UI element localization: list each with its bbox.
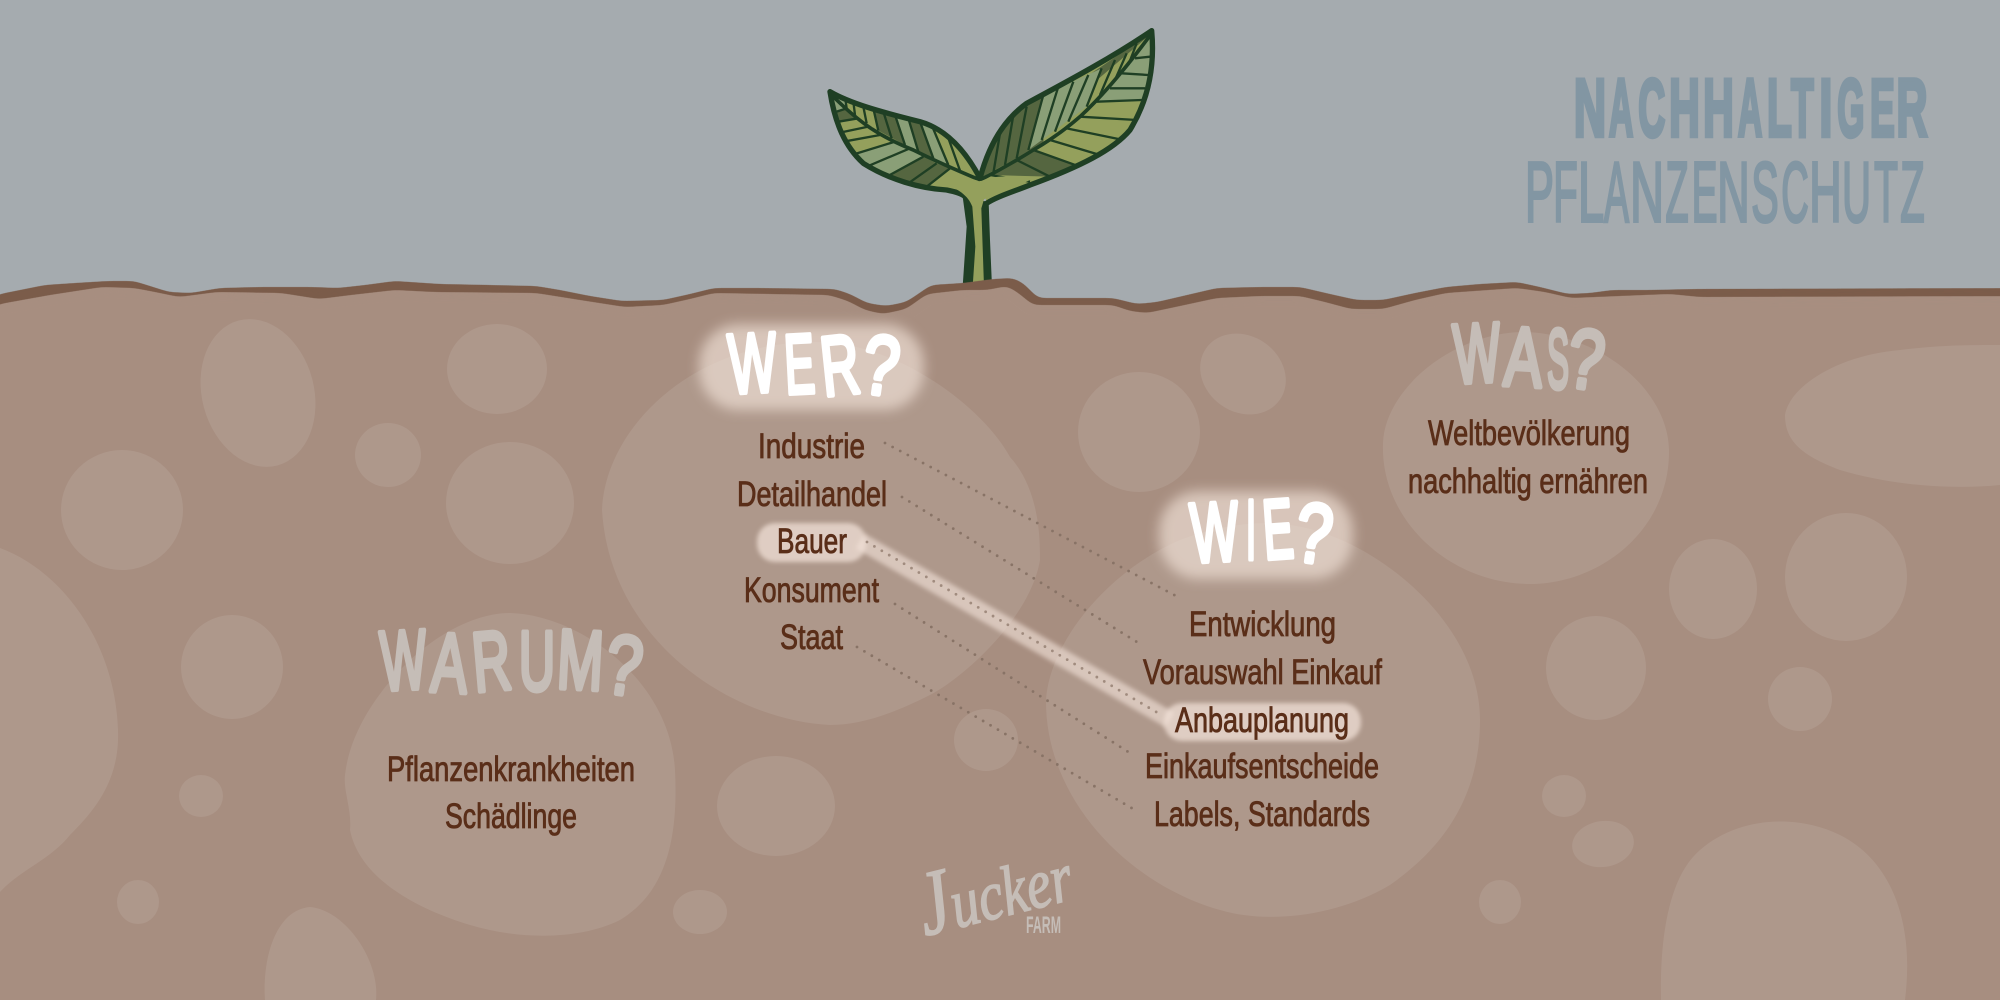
dotted connector lines between WER and WIE lists [857, 443, 1180, 810]
text: was items: nachhaltig ernähren [1408, 462, 1648, 501]
right leaf [977, 27, 1160, 207]
title: F [1553, 146, 1578, 240]
soil stones and blobs [0, 306, 2000, 1000]
list: wer items: Konsument [744, 571, 879, 610]
heading: wer: E [782, 316, 817, 412]
title: I [1819, 63, 1832, 154]
heading: was: A [1502, 309, 1545, 405]
logo: Jucker Farm: FARM [1026, 912, 1061, 939]
panel: wie [1143, 481, 1382, 834]
heading: wie: I [1246, 483, 1256, 577]
soil ground [0, 286, 2000, 1000]
heading: was: S [1547, 312, 1569, 406]
heading: wie [1188, 481, 1338, 582]
heading: wie: W [1188, 484, 1241, 580]
title: N [1717, 146, 1750, 240]
left leaf [827, 89, 982, 198]
title: E [1870, 63, 1895, 154]
heading: was: ? [1562, 310, 1610, 408]
list: wie items: Einkaufsentscheide [1145, 747, 1379, 786]
title: H [1703, 63, 1734, 154]
heading: warum: A [429, 615, 470, 711]
list: wie items: Anbauplanung [1175, 701, 1349, 740]
illustration: seedling plant [813, 27, 1160, 287]
text: was items: Weltbevölkerung [1428, 414, 1630, 453]
text: warum items: Pflanzenkrankheiten [387, 750, 635, 789]
title: T [1874, 146, 1898, 240]
title [1525, 63, 1928, 240]
list: wer items: Detailhandel [737, 475, 887, 514]
panel: wer [726, 315, 905, 657]
title: T [1791, 63, 1814, 154]
panel: was blob [1383, 332, 1669, 584]
title: A [1604, 146, 1629, 240]
title: G [1837, 63, 1864, 154]
title: N [1574, 63, 1606, 154]
list: wer items: Bauer [777, 522, 847, 561]
list: wie items: Vorauswahl Einkauf [1143, 653, 1382, 692]
list: wer items: Industrie [758, 427, 865, 466]
heading: warum [378, 612, 648, 714]
title: P [1525, 146, 1554, 240]
heading: was [1451, 305, 1610, 408]
title: N [1630, 146, 1664, 240]
title: A [1609, 63, 1633, 154]
title: E [1692, 146, 1718, 240]
list: wie items: Labels, Standards [1154, 795, 1370, 834]
stem [946, 176, 1030, 287]
list: wie items: Entwicklung [1189, 605, 1336, 644]
title: R [1896, 63, 1928, 154]
heading: warum: W [378, 612, 429, 708]
heading: wie: E [1260, 481, 1296, 577]
title: U [1842, 146, 1871, 240]
title: L [1767, 63, 1792, 154]
heading: wer: ? [857, 316, 905, 414]
heading: wer: W [726, 315, 779, 411]
title: Z [1666, 146, 1689, 240]
title: C [1638, 63, 1665, 154]
heading: warum: U [519, 614, 555, 708]
panel: was [1408, 305, 1648, 501]
title: S [1751, 146, 1779, 240]
title: H [1809, 146, 1842, 240]
title: L [1578, 146, 1604, 240]
heading: wer [726, 315, 905, 414]
sky background [0, 0, 2000, 310]
list: wer items [737, 427, 887, 657]
title: Z [1900, 146, 1925, 240]
glow: wie heading highlight [1159, 491, 1353, 579]
heading: warum: M [555, 612, 606, 708]
panel: warum blob [345, 613, 676, 936]
heading: warum: R [468, 613, 514, 710]
panel: wie blob [1046, 523, 1480, 917]
heading: wer: R [816, 316, 864, 414]
soil surface line [0, 278, 2000, 340]
glow: wer heading highlight [699, 324, 924, 410]
list: wer items: Staat [780, 618, 843, 657]
panel: warum [378, 612, 648, 836]
panel: wer blob [602, 342, 1040, 725]
heading: was: W [1451, 305, 1503, 401]
heading: wie: ? [1290, 484, 1338, 582]
heading: warum: ? [600, 616, 648, 714]
text: was items [1408, 414, 1648, 501]
text: warum items: Schädlinge [445, 797, 577, 836]
title: A [1738, 63, 1762, 154]
title: H [1669, 63, 1700, 154]
connector: highlighted link from Bauer to Anbauplanung [757, 523, 1361, 741]
title: C [1781, 146, 1809, 240]
text: warum items [387, 750, 635, 836]
list: wie items [1143, 605, 1382, 834]
logo: Jucker Farm: Jucker [905, 819, 1082, 955]
